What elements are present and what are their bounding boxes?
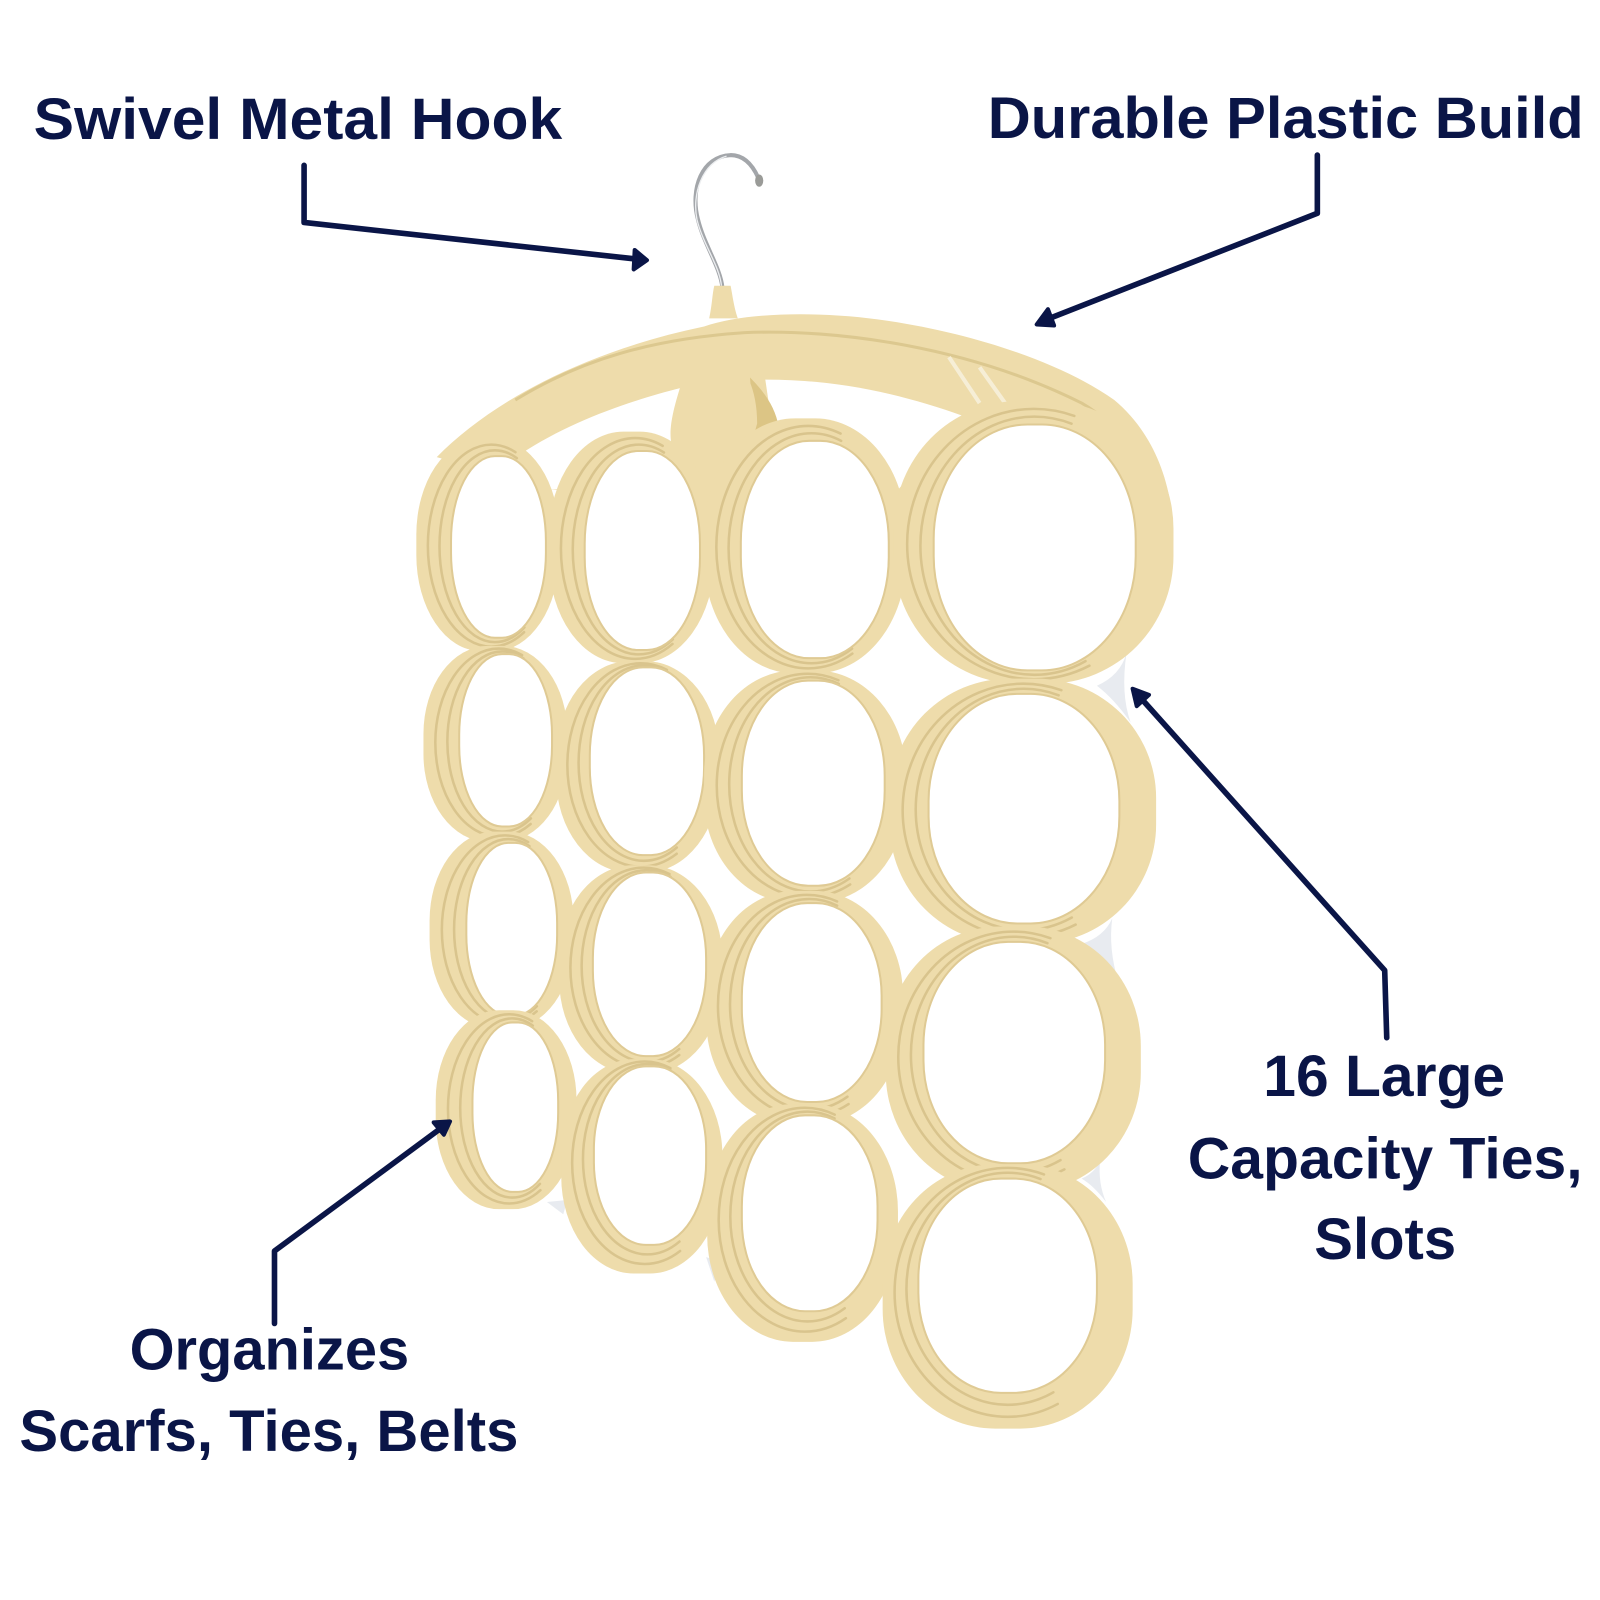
ring: column 1 row 2 <box>423 646 567 842</box>
ring: column 2 row 2 <box>556 661 719 872</box>
ring: column 4 row 1 <box>894 401 1173 684</box>
text block: 16 large capacity ties slots: Slots <box>1314 1207 1456 1272</box>
hanger top arch <box>437 314 1173 541</box>
text block: 16 large capacity ties slots: Capacity Ties, <box>1188 1127 1583 1192</box>
ring: column 4 row 2 <box>890 679 1156 944</box>
ring: column 3 row 3 <box>706 891 903 1124</box>
text block: organizes scarfs ties belts: Organizes <box>130 1317 409 1382</box>
text block: 16 large capacity ties slots <box>1188 1044 1583 1272</box>
heading: swivel metal hook: Swivel Metal Hook <box>34 87 563 152</box>
ring: column 3 row 1 <box>704 418 906 673</box>
arrow: durable plastic build <box>1037 155 1317 326</box>
arrow: organizes scarfs ties belts <box>274 1121 450 1323</box>
ring: column 1 row 1 <box>416 439 559 651</box>
panel: sixteen ring slots <box>416 401 1173 1429</box>
plastic film patches behind rings <box>547 653 1131 1282</box>
ring: column 4 row 3 <box>886 927 1141 1192</box>
heading: durable plastic build: Durable Plastic Build <box>988 86 1584 151</box>
ring: column 2 row 4 <box>561 1059 722 1273</box>
ring: column 3 row 4 <box>707 1104 898 1342</box>
icon: swivel metal hook <box>695 155 763 318</box>
ring: column 1 row 3 <box>430 832 573 1029</box>
text block: organizes scarfs ties belts: Scarfs, Ties, Belts <box>19 1399 518 1464</box>
arrow: swivel metal hook <box>304 165 647 269</box>
ring: column 3 row 2 <box>704 670 906 903</box>
ring: column 2 row 1 <box>549 432 714 663</box>
text block: organizes scarfs ties belts <box>19 1317 518 1464</box>
ring: column 4 row 4 <box>883 1164 1133 1429</box>
ring: column 2 row 3 <box>559 865 722 1073</box>
ring: column 1 row 4 <box>436 1010 577 1209</box>
text block: 16 large capacity ties slots: 16 Large <box>1263 1044 1505 1109</box>
arrow: 16 large capacity ties slots <box>1133 689 1387 1038</box>
hanger centre stem <box>671 376 779 500</box>
